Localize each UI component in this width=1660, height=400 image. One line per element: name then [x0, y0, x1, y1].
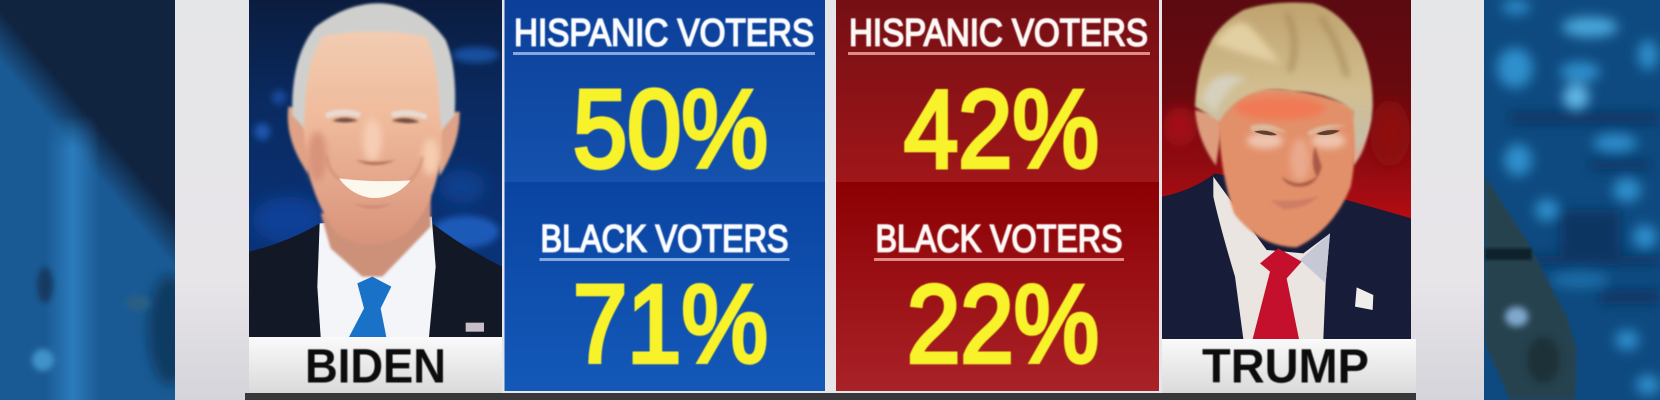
panel: Trump numbers	[836, 0, 1159, 391]
brows and eyes	[1250, 124, 1288, 133]
shirt	[1213, 177, 1330, 339]
lapel pin	[1355, 287, 1373, 310]
smile	[326, 157, 422, 182]
heading: Hispanic voters (Trump): HISPANIC VOTERS	[849, 12, 1148, 54]
figure: 22%: 22%	[907, 263, 1099, 386]
nose	[1290, 138, 1310, 182]
ears	[286, 104, 310, 174]
tie	[349, 277, 391, 337]
figure: 42%: 42%	[904, 68, 1099, 191]
figure: 71%: 71%	[573, 263, 768, 386]
name plate: Biden	[249, 337, 502, 394]
name plate: Trump: TRUMP	[1202, 340, 1369, 394]
panel: light backing	[175, 0, 1484, 400]
tie	[1253, 248, 1302, 339]
hair	[292, 3, 455, 133]
name plate: Trump	[1162, 339, 1416, 394]
brows and eyes	[325, 109, 361, 118]
heading: Black voters (Biden): BLACK VOTERS	[540, 218, 788, 260]
face	[304, 31, 442, 244]
blurred foreground figure	[1485, 177, 1577, 400]
suit	[249, 223, 502, 337]
heading: Black voters (Trump): BLACK VOTERS	[876, 218, 1122, 260]
figure: 50%: 50%	[573, 68, 768, 191]
name plate: Biden: BIDEN	[305, 340, 446, 394]
ears	[1195, 110, 1223, 166]
suit	[1162, 173, 1411, 339]
panel: Biden numbers	[504, 0, 825, 391]
shirt	[317, 217, 436, 337]
portrait: Trump	[1162, 0, 1411, 339]
background: left blurred studio	[0, 0, 192, 400]
neck	[321, 197, 431, 277]
bottom dark strip	[245, 393, 1416, 400]
heading: Hispanic voters (Biden): HISPANIC VOTERS	[514, 12, 814, 54]
mouth	[1272, 197, 1316, 210]
nose	[363, 118, 382, 162]
background: right blurred data wall	[1484, 0, 1660, 400]
flag pin	[466, 323, 484, 332]
hair	[1195, 2, 1373, 150]
portrait: Biden	[249, 0, 502, 337]
face	[1218, 89, 1355, 247]
